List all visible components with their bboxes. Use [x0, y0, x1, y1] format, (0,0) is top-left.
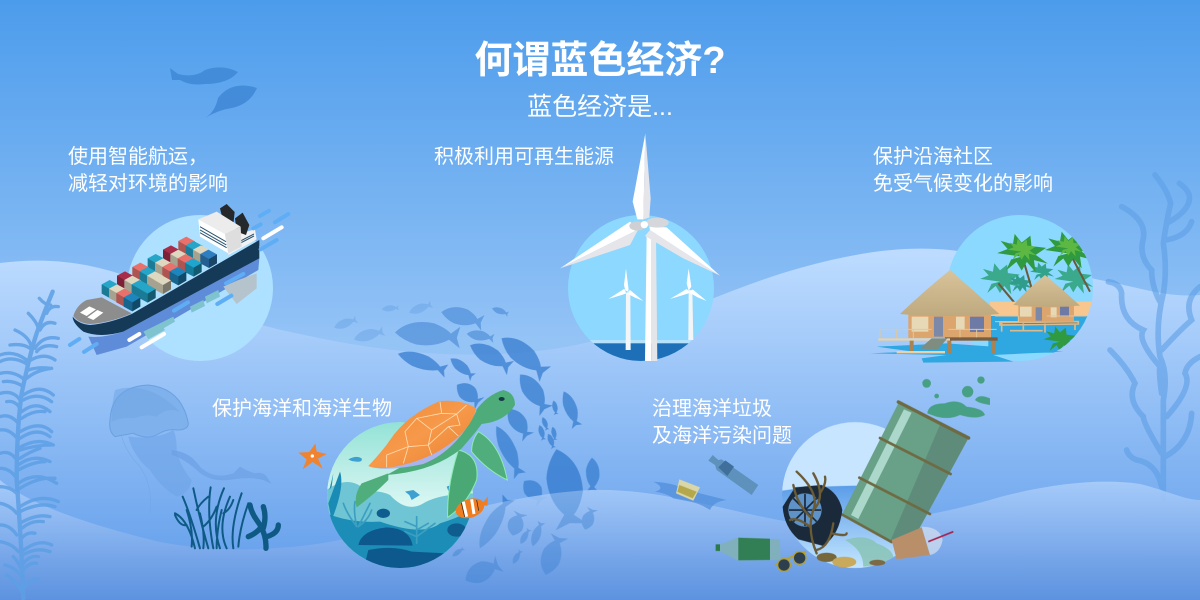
palms	[980, 232, 1093, 303]
turtle flippers	[356, 432, 507, 517]
containers	[102, 237, 217, 311]
ship reflection	[88, 258, 259, 355]
school of fish silhouettes	[333, 300, 599, 588]
green bottle	[716, 537, 781, 561]
illustration: wind turbines	[560, 133, 720, 363]
ship bridge	[198, 204, 257, 255]
text: smart shipping: 使用智能航运，	[68, 146, 208, 168]
panel: coastal communities	[870, 145, 1097, 363]
shell scutes	[387, 402, 467, 467]
kelp: right side	[1108, 175, 1200, 498]
circle backdrop	[127, 215, 273, 361]
lower fish silhouettes over front wave	[451, 446, 598, 588]
turtle shell rim	[368, 408, 477, 469]
panel: marine litter	[652, 376, 990, 571]
lagoon	[988, 316, 1095, 353]
illustration: overwater huts	[870, 232, 1097, 363]
text: marine litter: 及海洋污染问题	[652, 424, 792, 447]
title: 何谓蓝色经济?	[474, 40, 726, 82]
water patches	[870, 343, 1063, 363]
text: smart shipping: 减轻对环境的影响	[68, 172, 228, 195]
sunglasses	[775, 552, 806, 571]
main turbine tower	[645, 235, 651, 361]
panel: protect ocean life	[212, 390, 515, 570]
sea hills	[327, 482, 473, 560]
coral fan	[175, 487, 248, 548]
kelp: left side	[0, 292, 58, 598]
hut two	[995, 275, 1087, 333]
illustration: sea turtle	[356, 390, 515, 517]
text: coastal communities: 保护沿海社区	[873, 146, 993, 168]
floating bottle and can	[653, 455, 758, 510]
circle backdrop	[947, 215, 1093, 361]
turtle body and head	[387, 390, 515, 475]
pebbles	[832, 557, 885, 567]
coral silhouettes	[343, 502, 435, 543]
hut one	[878, 270, 999, 353]
icon: clownfish	[453, 495, 488, 522]
jellyfish bell	[110, 385, 188, 437]
illustration: polluted sea circle	[653, 376, 990, 571]
ship hull	[73, 240, 259, 335]
text: renewable energy: 积极利用可再生能源	[434, 145, 614, 168]
text: protect ocean life: 保护海洋和海洋生物	[212, 397, 392, 420]
speed lines	[70, 211, 288, 352]
sea	[590, 340, 692, 361]
turtle shell	[368, 401, 476, 468]
plastic cup	[892, 527, 953, 559]
coral branch	[248, 505, 278, 548]
ship deck	[73, 297, 132, 324]
panel: smart shipping	[68, 145, 288, 361]
icon: whales silhouette	[170, 67, 257, 118]
text: coastal communities: 免受气候变化的影响	[873, 172, 1053, 195]
small fish	[348, 457, 456, 500]
green spill	[927, 396, 990, 418]
tyre with seaweed	[783, 472, 847, 562]
small turbine right	[670, 268, 707, 340]
illustration: container ship	[70, 204, 288, 355]
circle undersea scene	[327, 422, 477, 570]
small palm foreground	[1044, 326, 1077, 352]
clipped scenery	[980, 232, 1097, 353]
icon: starfish	[298, 443, 327, 469]
main turbine blades	[560, 133, 720, 276]
beach	[990, 302, 1097, 317]
subtitle: 蓝色经济是...	[527, 93, 673, 121]
small turbine left	[608, 268, 643, 350]
middle wave layer	[0, 249, 1200, 600]
jellyfish tentacles	[122, 430, 272, 513]
jellyfish with coral	[110, 385, 278, 548]
front wave layer	[0, 480, 1200, 600]
text: marine litter: 治理海洋垃圾	[652, 398, 772, 420]
panel: renewable energy	[434, 133, 720, 363]
circle backdrop	[568, 215, 714, 361]
barrel	[840, 402, 969, 542]
